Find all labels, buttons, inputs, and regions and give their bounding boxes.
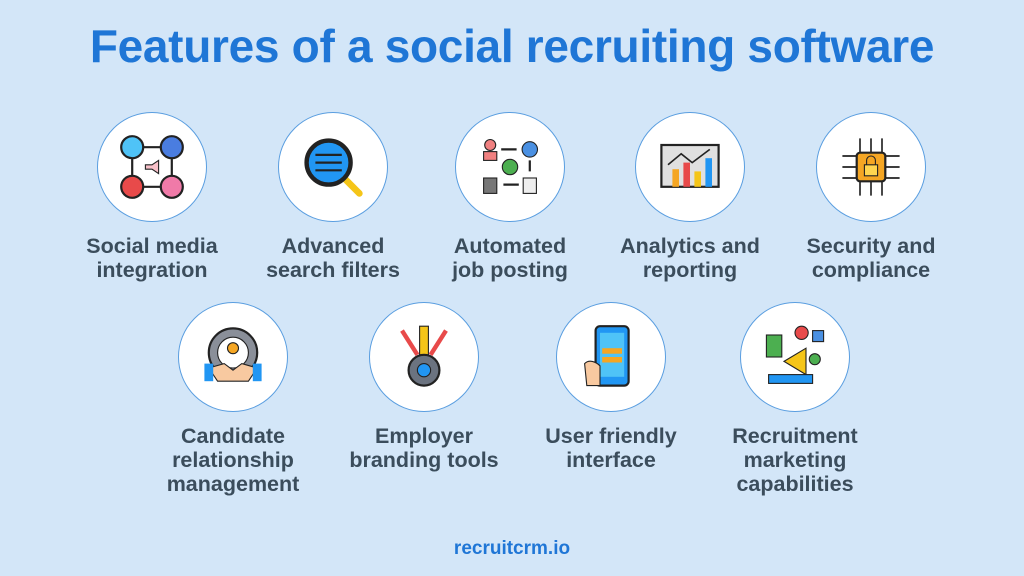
label: Social media <box>86 234 218 258</box>
label: Candidate <box>181 424 285 448</box>
icon: user friendly <box>556 302 666 412</box>
label: Recruitment <box>732 424 858 448</box>
label <box>86 234 218 282</box>
label <box>620 234 760 282</box>
label: management <box>167 472 299 496</box>
label <box>545 424 677 472</box>
label: branding tools <box>349 448 499 472</box>
title: Features of a social recruiting software <box>90 20 934 72</box>
label <box>349 424 499 472</box>
icon: branding tools <box>369 302 479 412</box>
label: Employer <box>375 424 473 448</box>
label: Advanced <box>282 234 384 258</box>
label: Automated <box>454 234 566 258</box>
label: interface <box>566 448 656 472</box>
label: Security and <box>806 234 936 258</box>
label: search filters <box>266 258 400 282</box>
label <box>452 234 568 282</box>
icon: security <box>816 112 926 222</box>
icon: social media <box>97 112 207 222</box>
label: User friendly <box>545 424 677 448</box>
label <box>167 424 299 496</box>
label <box>266 234 400 282</box>
icon: analytics <box>635 112 745 222</box>
label: integration <box>96 258 208 282</box>
icon: candidate relationship <box>178 302 288 412</box>
label: relationship <box>172 448 294 472</box>
icon: search filters <box>278 112 388 222</box>
icon: recruitment marketing <box>740 302 850 412</box>
label: Analytics and <box>620 234 760 258</box>
label: compliance <box>812 258 930 282</box>
label: job posting <box>452 258 568 282</box>
label <box>806 234 936 282</box>
footer: recruitcrm.io <box>454 538 570 559</box>
label: reporting <box>643 258 737 282</box>
label <box>732 424 858 496</box>
icon: automated posting <box>455 112 565 222</box>
label: marketing <box>744 448 846 472</box>
label: capabilities <box>736 472 854 496</box>
